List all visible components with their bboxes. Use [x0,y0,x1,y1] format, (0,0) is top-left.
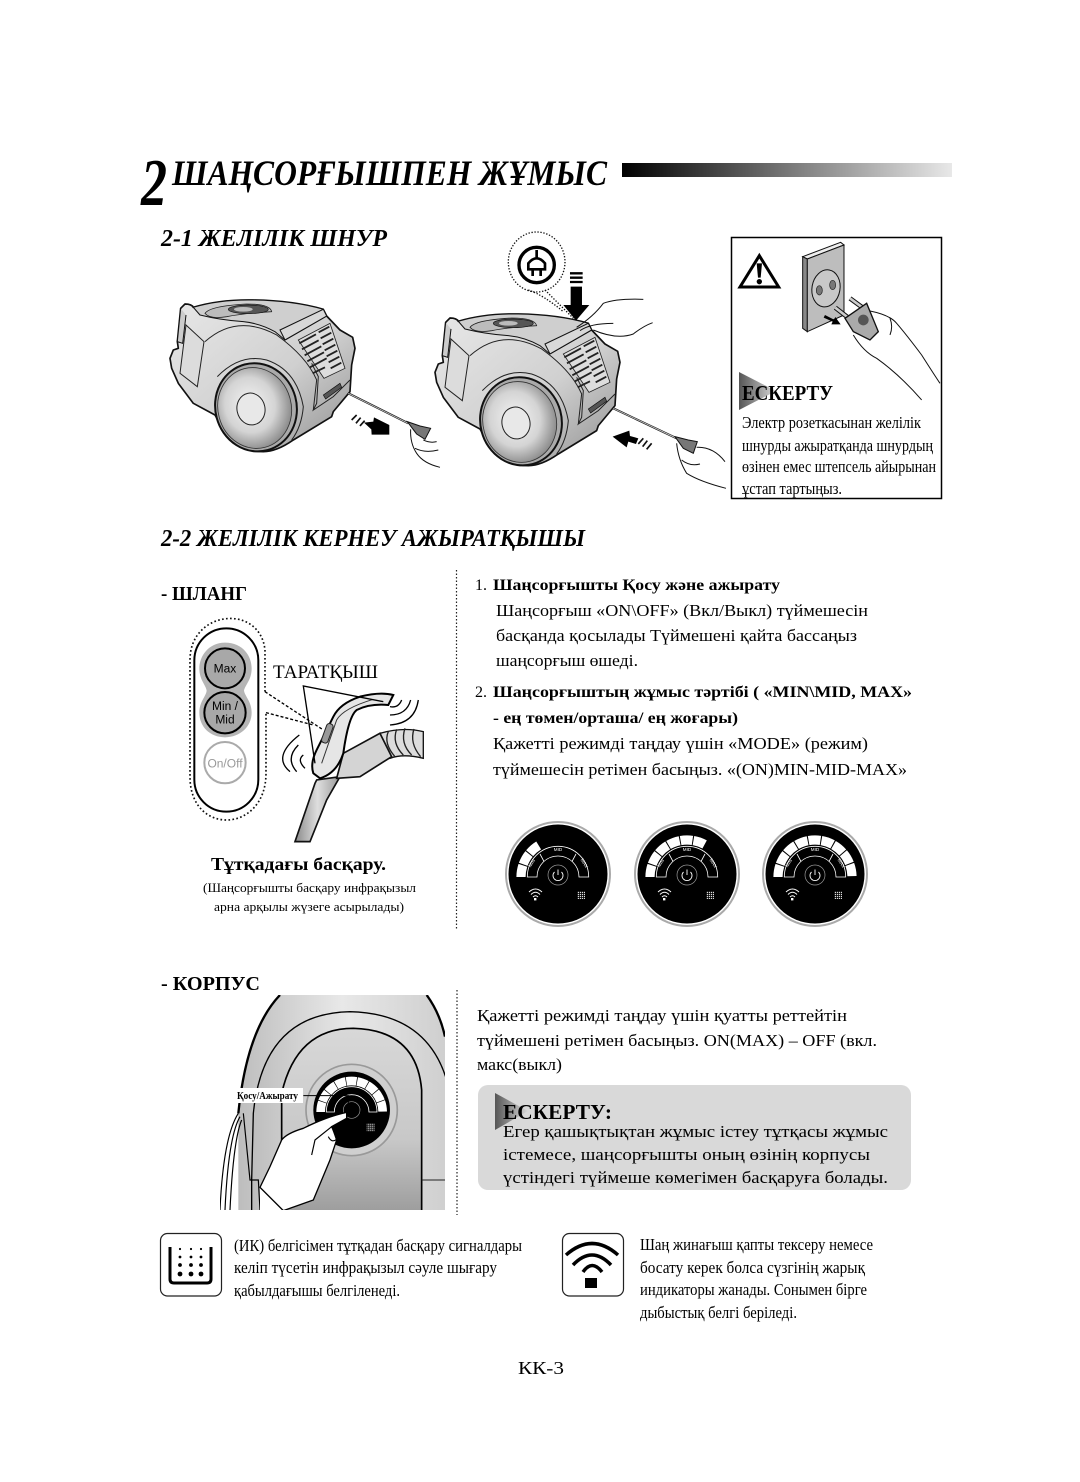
instruction 1: Шаңсорғышты Қосу және ажырату [493,577,780,594]
press arrow [563,273,589,321]
caution heading: ЕСКЕРТУ [742,381,833,405]
instruction 1: Шаңсорғыш «ON\OFF» (Вкл/Выкл) түймешесін [496,601,868,620]
dial: max mode: MIN [784,858,793,868]
instruction 2: түймешесін ретімен басыңыз. «(ON)MIN-MID-MAX» [493,760,907,779]
hose remote panel: Min / [212,699,239,713]
handle control note [203,880,417,914]
instruction 2: 2. [475,684,487,701]
dial: mid mode: MIN [656,858,665,868]
caution callout: үстіндегі түймеше көмегімен басқаруға болады. [503,1168,888,1187]
dust bag description: индикаторы жанады. Сонымен бірге [640,1280,867,1299]
body control text: түймешені ретімен басыңыз. ON(MAX) – OFF (вкл. [477,1031,877,1050]
hose remote panel: On/Off [207,756,243,770]
instruction 1: 1. [475,577,487,594]
title gradient bar [622,163,952,177]
hose remote panel: Max [214,662,236,676]
power label: Қосу/Ажырату [237,1090,298,1102]
caution callout: ЕСКЕРТУ: [503,1100,612,1124]
instruction 1 [475,577,868,670]
transmitter label: ТАРАТҚЫШ [273,662,378,683]
body control text [477,1006,877,1074]
caution text: өзінен емес штепсель айырынан [742,457,936,476]
caution callout: істемесе, шаңсорғышты оның өзінің корпусы [503,1145,870,1164]
plug icon bubble [508,232,573,318]
instruction 1: шаңсорғыш өшеді. [496,651,638,670]
hose handle illustration [265,686,423,842]
vacuum illustration: rewinding the cord [435,232,726,488]
dial: max mode: MID [811,847,820,852]
infrared description: келіп түсетін инфрақызыл сәуле шығару [234,1258,497,1277]
instruction 2: Шаңсорғыштың жұмыс тәртібі ( «MIN\MID, MAX» [493,684,912,701]
dial: max mode [763,822,867,926]
title number: 2 [140,146,167,220]
handle control note: арна арқылы жүзеге асырылады) [214,899,404,914]
infrared description: қабылдағышы белгіленеді. [234,1281,400,1300]
body control text: Қажетті режимді таңдау үшін қуатты реттейтін [477,1006,847,1025]
dial: mid mode: MID [683,847,692,852]
heading 2-2: 2-2 ЖЕЛІЛІК КЕРНЕУ АЖЫРАТҚЫШЫ [160,526,586,552]
dial: max mode: MAX [837,858,846,869]
instruction 1: басқанда қосылады Түймешені қайта бассаңыз [496,626,857,645]
caution text: Электр розеткасынан желілік [742,413,922,432]
body heading: - КОРПУС [161,973,260,995]
dial: min mode: MIN [527,858,536,868]
hose remote panel [190,618,266,820]
dial: min mode: MID [554,847,563,852]
hose remote panel: Mid [215,712,235,726]
dust bag description: Шаң жинағыш қапты тексеру немесе [640,1235,873,1254]
dust bag description: дыбыстық белгі беріледі. [640,1303,797,1322]
handle control note: (Шаңсорғышты басқару инфрақызыл [203,880,417,895]
infrared description: (ИК) белгісімен тұтқадан басқару сигналдары [234,1236,522,1255]
caution callout [478,1085,911,1190]
dial: mid mode [635,822,739,926]
caution text: шнурды ажыратқанда шнурдың [742,436,933,455]
vacuum illustration: pulling the cord out [170,300,440,467]
caution illustration: unplugging from socket [740,242,940,400]
instruction 2 [475,684,912,779]
body control illustration [220,995,447,1213]
infrared description [234,1236,522,1300]
dust bag description [640,1235,873,1322]
caution text [742,413,936,498]
handle control caption: Тұтқадағы басқару. [211,854,386,874]
caution marker triangle [739,372,776,410]
instruction 2: Қажетті режимді таңдау үшін «MODE» (режим) [493,734,868,753]
hose heading: - ШЛАНГ [161,583,247,605]
caution panel [732,238,942,498]
dial: min mode: MAX [580,858,589,869]
page number: КК-3 [518,1358,564,1378]
title: ШАҢСОРҒЫШПЕН ЖҰМЫС [171,153,608,193]
icon: dust bag signal [562,1234,624,1296]
icon: infrared receiver [160,1234,222,1296]
caution callout: Егер қашықтықтан жұмыс істеу тұтқасы жұмыс [503,1122,888,1141]
dust bag description: босату керек болса сүзгінің жарық [640,1258,866,1277]
caution text: ұстап тартыңыз. [742,479,842,498]
dial: min mode [506,822,610,926]
heading 2-1: 2-1 ЖЕЛІЛІК ШНУР [160,226,387,252]
body control text: макс(выкл) [477,1055,562,1074]
dial: mid mode: MAX [709,858,718,869]
instruction 2: - ең төмен/орташа/ ең жоғары) [493,710,738,727]
